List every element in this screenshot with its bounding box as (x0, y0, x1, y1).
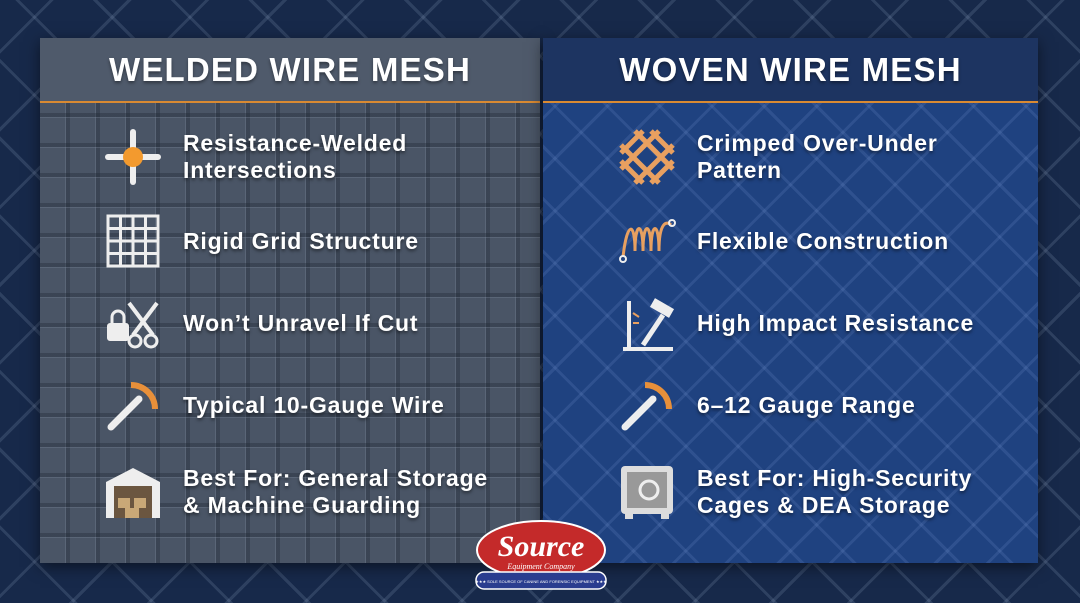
item: rigid grid (106, 214, 419, 268)
item: resistance-welded: Resistance-Welded (183, 130, 407, 156)
item: gauge range: 6–12 Gauge Range (697, 392, 916, 418)
heading: welded: WELDED WIRE MESH (109, 50, 471, 88)
panel: woven wire mesh (543, 38, 1038, 563)
item: high security (621, 465, 972, 522)
item: won't unravel (107, 302, 418, 348)
logo: Source Equipment Company: Equipment Company (506, 562, 575, 571)
logo: Source Equipment Company: Source (498, 530, 584, 563)
heading: welded (40, 38, 540, 103)
item: crimped: Crimped Over-Under (697, 130, 938, 156)
item: resistance-welded: Intersections (183, 157, 337, 183)
item: best for (106, 465, 488, 522)
item: resistance-welded (105, 129, 407, 185)
item: crimped (619, 129, 938, 185)
logo: Source Equipment Company: ★★★ SOLE SOURCE OF CANINE AND FORENSIC EQUIPMENT ★★★ (475, 579, 607, 584)
item: gauge: Typical 10-Gauge Wire (183, 392, 445, 418)
panel: welded wire mesh (40, 38, 540, 563)
item: impact: High Impact Resistance (697, 310, 974, 336)
item: rigid grid: Rigid Grid Structure (183, 228, 419, 254)
item: won't unravel: Won’t Unravel If Cut (183, 310, 418, 336)
item: flexible (619, 219, 949, 263)
item: high security: Best For: High-Security (697, 465, 972, 491)
item: crimped: Pattern (697, 157, 782, 183)
heading: woven (543, 38, 1038, 103)
item: gauge (108, 382, 445, 430)
item: flexible: Flexible Construction (697, 228, 949, 254)
logo: Source Equipment Company (475, 520, 607, 590)
item: gauge range (622, 382, 916, 430)
item: high security: Cages & DEA Storage (697, 492, 950, 518)
item: best for: Best For: General Storage (183, 465, 488, 491)
item: impact (623, 298, 974, 351)
item: best for: & Machine Guarding (183, 492, 421, 518)
heading: woven: WOVEN WIRE MESH (619, 50, 962, 88)
